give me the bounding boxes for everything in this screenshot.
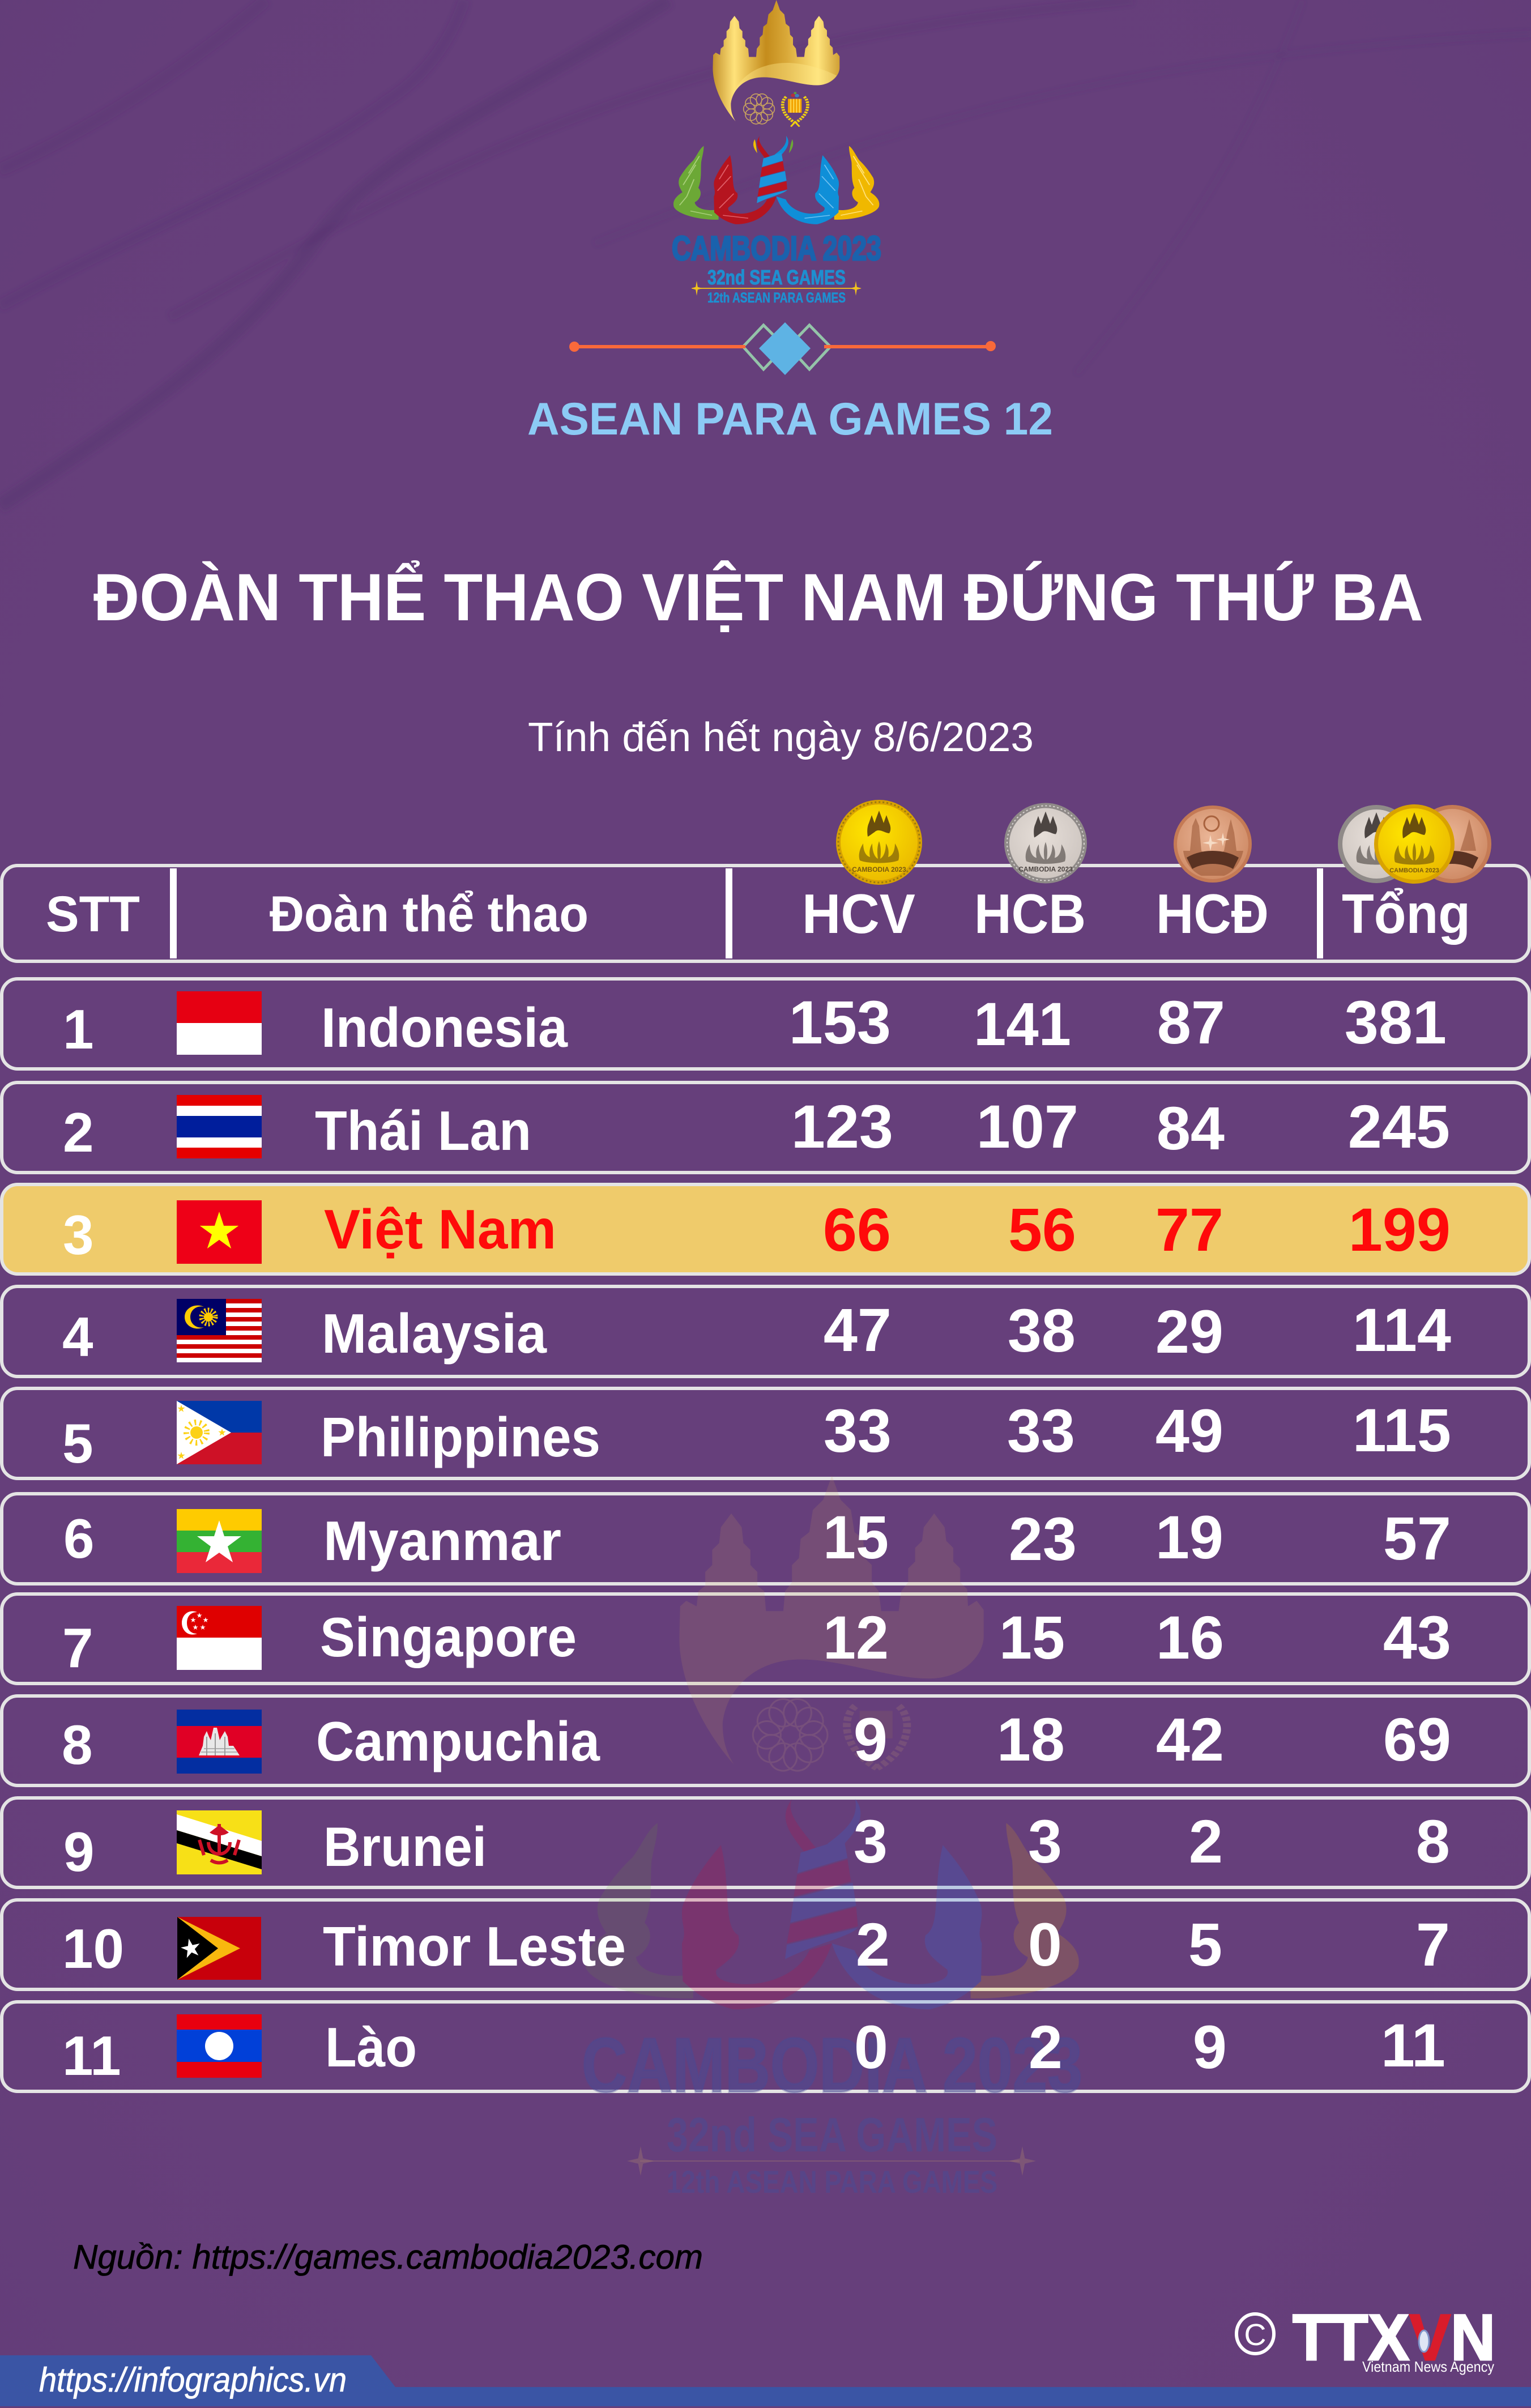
icon: gold medal: CAMBODIA 2023 [852,866,906,873]
row 6: Myanmar: 19 [1155,1503,1223,1571]
row 3: Việt Nam (highlight): 3 [63,1204,94,1266]
row 8: Campuchia: 18 [997,1705,1065,1774]
table row frames [2,866,1529,2091]
title: ĐOÀN THỂ THAO VIỆT NAM ĐỨNG THỨ BA [93,560,1423,635]
row 11: Lào: 9 [1193,2013,1227,2081]
top logo: Cambodia 2023 SEA Games [672,0,881,306]
top logo: Cambodia 2023 SEA Games: CAMBODIA 2023 [672,229,881,267]
row 11: Lào: 11 [62,2025,121,2087]
flag: Vietnam [177,1200,262,1264]
watermark logo [582,1476,1082,2200]
flag: Singapore [177,1606,262,1670]
row 8: Campuchia: 9 [854,1705,888,1774]
flag: Thailand [177,1095,262,1158]
flag: Philippines [177,1401,262,1464]
icon: silver medal [1004,803,1087,884]
row 8: Campuchia: 69 [1383,1705,1451,1774]
row 4: Malaysia: 47 [824,1295,892,1364]
row 5: Philippines: 49 [1155,1396,1223,1465]
row 10: Timor Leste: 0 [1028,1910,1062,1979]
TTXVN logo: Vietnam News Agency [1362,2358,1494,2375]
row 3: Việt Nam (highlight) [63,1195,1451,1266]
header row: Tổng [1342,883,1470,945]
row 1: Indonesia [63,988,1447,1060]
row 7: Singapore: 15 [999,1603,1065,1672]
row 3: Việt Nam (highlight): 66 [823,1195,891,1264]
flag: Malaysia [177,1299,262,1362]
row 2: Thái Lan: 84 [1157,1094,1225,1162]
row 5: Philippines: 33 [824,1396,892,1465]
row 11: Lào: Lào [325,2016,417,2078]
row 9: Brunei: Brunei [323,1815,487,1878]
row 5: Philippines: 5 [62,1412,93,1474]
header row: HCB [974,883,1086,945]
row 8: Campuchia: Campuchia [316,1710,600,1772]
row 3: Việt Nam (highlight): 56 [1008,1195,1076,1264]
row 4: Malaysia: Malaysia [322,1302,547,1365]
ornament divider [569,322,996,375]
row 9: Brunei: 2 [1189,1807,1223,1876]
row 6: Myanmar: 6 [63,1507,95,1570]
row 9: Brunei: 9 [63,1821,95,1883]
row 3: Việt Nam (highlight): 199 [1349,1195,1451,1264]
row 11: Lào: 0 [854,2013,888,2081]
row 9: Brunei: 3 [854,1807,888,1876]
row 5: Philippines: 33 [1007,1396,1075,1465]
top logo: Cambodia 2023 SEA Games: 12th ASEAN PARA GAMES [707,290,846,306]
flag: Timor Leste [177,1917,261,1980]
date note: Tính đến hết ngày 8/6/2023 [528,715,1034,760]
row 2: Thái Lan: Thái Lan [315,1099,531,1162]
header row [46,868,1470,958]
row 10: Timor Leste: 7 [1416,1910,1450,1979]
row 4: Malaysia: 114 [1353,1295,1451,1364]
row 1: Indonesia: 381 [1345,988,1447,1056]
row 2: Thái Lan: 245 [1348,1092,1450,1161]
row 4: Malaysia: 29 [1155,1297,1223,1366]
footer band [0,2355,1531,2406]
flag: Laos [177,2014,262,2078]
TTXVN logo: TTXVN [1293,2302,1495,2374]
flag: Indonesia [177,991,262,1055]
row 3: Việt Nam (highlight): 77 [1155,1195,1223,1264]
row 2: Thái Lan: 107 [976,1092,1078,1161]
flag: Cambodia [177,1710,262,1774]
row 7: Singapore: 16 [1156,1603,1224,1672]
row 7: Singapore: 12 [823,1603,889,1672]
flag: Myanmar [177,1509,262,1573]
flag: Brunei [177,1810,262,1874]
row 1: Indonesia: 141 [974,990,1071,1058]
row 2: Thái Lan: 123 [791,1092,893,1161]
subtitle: ASEAN Para Games 12: ASEAN PARA GAMES 12 [527,394,1053,445]
row 9: Brunei: 3 [1028,1807,1062,1876]
watermark logo: 12th ASEAN PARA GAMES [667,2164,997,2200]
icon: stacked medals for total [1338,804,1491,884]
header row: HCĐ [1156,883,1269,945]
row 6: Myanmar: Myanmar [323,1510,561,1572]
watermark logo: CAMBODIA 2023 [582,2022,1082,2109]
row 5: Philippines [62,1396,1451,1474]
row 6: Myanmar: 57 [1383,1504,1451,1572]
TTXVN logo: C [1244,2318,1266,2352]
row 1: Indonesia: Indonesia [321,996,568,1059]
source note: Nguồn: https://games.cambodia2023.com [73,2238,703,2276]
row 4: Malaysia: 38 [1008,1296,1076,1365]
row 7: Singapore: 43 [1383,1603,1451,1672]
row 3: Việt Nam (highlight): Việt Nam [324,1198,556,1260]
row 9: Brunei: 8 [1416,1807,1450,1876]
row 4: Malaysia [62,1295,1451,1368]
row 1: Indonesia: 87 [1157,988,1225,1056]
row 7: Singapore: Singapore [320,1606,577,1668]
row 10: Timor Leste: 5 [1188,1910,1222,1979]
row 1: Indonesia: 1 [63,998,94,1060]
icon: stacked medals for total: CAMBODIA 2023 [1389,867,1439,874]
header row: STT [46,885,140,942]
row 5: Philippines: 115 [1353,1396,1451,1464]
row 11: Lào: 2 [1029,2013,1063,2081]
footer url: https://infographics.vn [39,2361,347,2399]
row 8: Campuchia [62,1705,1451,1776]
row 10: Timor Leste [62,1910,1450,1980]
icon: gold medal [836,800,922,885]
header row: HCV [802,883,915,945]
row 10: Timor Leste: 10 [62,1917,124,1980]
header row: Đoàn thể thao [270,885,588,942]
icon: silver medal: CAMBODIA 2023 [1018,866,1073,873]
row 6: Myanmar: 23 [1009,1505,1077,1573]
row 5: Philippines: Philippines [321,1406,600,1468]
watermark logo: 32nd SEA GAMES [667,2108,997,2162]
row 9: Brunei [63,1807,1450,1883]
row 1: Indonesia: 153 [789,988,891,1056]
row 11: Lào [62,2011,1445,2087]
row 6: Myanmar [63,1503,1451,1573]
top logo: Cambodia 2023 SEA Games: 32nd SEA GAMES [707,266,846,289]
row 2: Thái Lan: 2 [63,1101,94,1163]
row 8: Campuchia: 42 [1156,1705,1224,1774]
icon: bronze medal [1174,805,1252,883]
row 2: Thái Lan [63,1092,1450,1163]
row 7: Singapore [62,1603,1451,1679]
row 10: Timor Leste: Timor Leste [323,1915,626,1977]
row 8: Campuchia: 8 [62,1714,93,1776]
row 4: Malaysia: 4 [62,1306,93,1368]
row 11: Lào: 11 [1381,2011,1445,2079]
row 10: Timor Leste: 2 [856,1910,890,1979]
row 7: Singapore: 7 [62,1617,93,1679]
row 6: Myanmar: 15 [823,1503,889,1571]
